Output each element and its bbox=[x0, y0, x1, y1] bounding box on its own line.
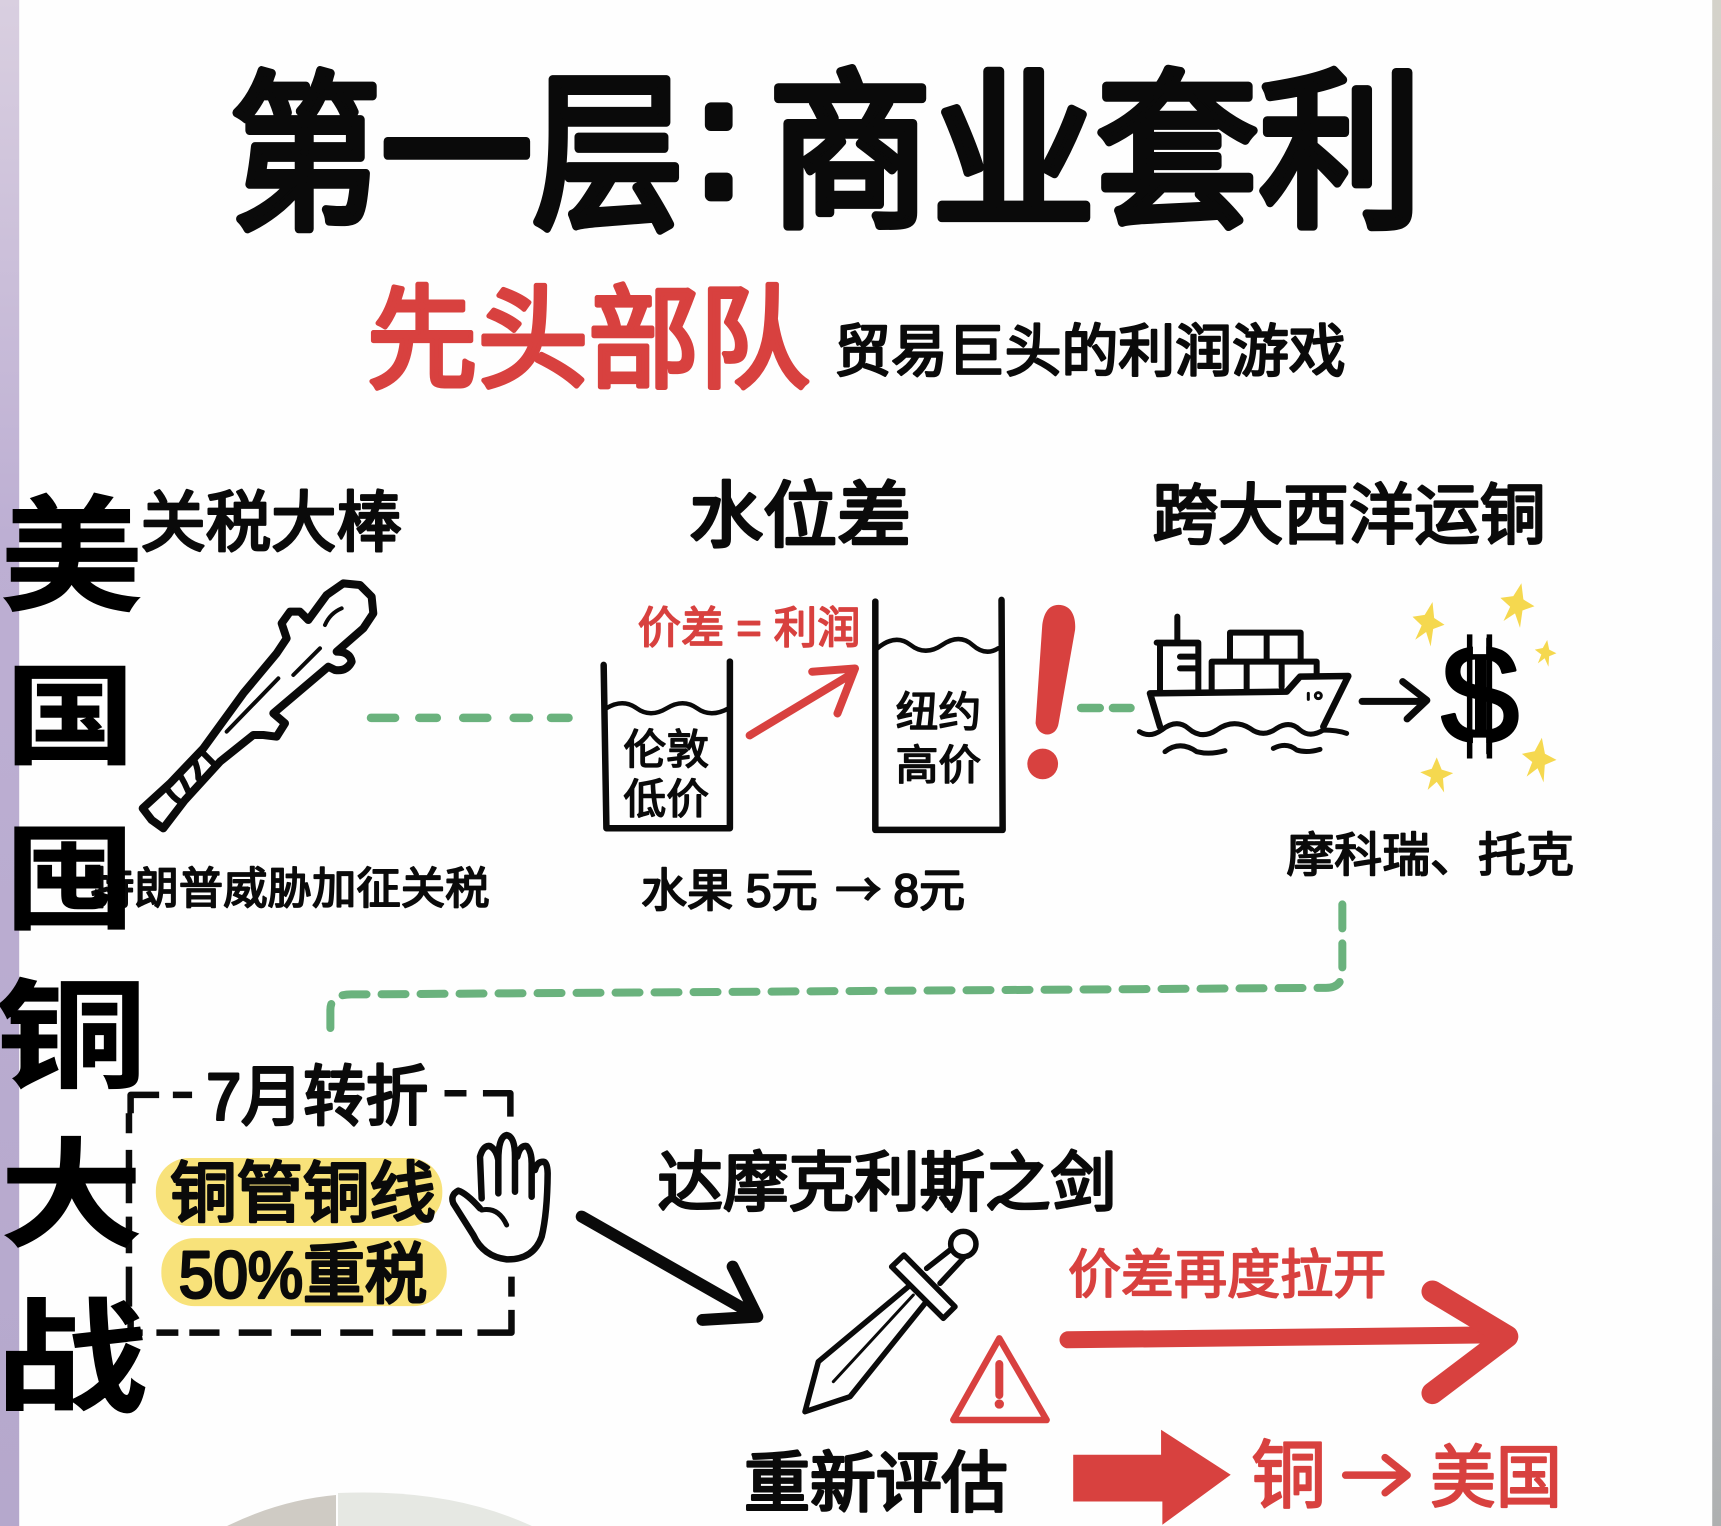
red long arrow bbox=[1068, 1291, 1507, 1393]
left tank: London low price: 低价 bbox=[623, 775, 709, 822]
caption: Mercuria, Trafigura: 摩科瑞、托克 bbox=[1286, 829, 1574, 882]
vertical title overlay: 美 bbox=[0, 487, 143, 627]
red rising arrow bbox=[750, 668, 855, 735]
vertical title overlay: 囤 bbox=[4, 817, 135, 945]
vertical title overlay: 大 bbox=[0, 1131, 143, 1263]
caption: fruit example: → bbox=[835, 855, 881, 921]
icon: stop hand bbox=[452, 1135, 548, 1259]
right tank: New York high price: 高价 bbox=[896, 741, 981, 788]
vertical title overlay: 国 bbox=[5, 657, 135, 779]
caption: Trump threat: 特朗普威胁加征关税 bbox=[90, 864, 490, 913]
right tank: New York high price: 纽约 bbox=[896, 689, 981, 736]
left tank: London low price: 伦敦 bbox=[623, 726, 709, 773]
icon: club bbox=[143, 583, 373, 828]
label: copper to USA bbox=[1251, 1434, 1562, 1518]
right tank: New York high price bbox=[875, 600, 1003, 830]
heading: transatlantic copper: 跨大西洋运铜 bbox=[1152, 478, 1545, 552]
photo fragment at bottom bbox=[227, 1492, 532, 1526]
heading: tariff club: 关税大棒 bbox=[140, 486, 402, 560]
subtitle: trade giants: 贸易巨头的利润游戏 bbox=[834, 320, 1346, 384]
highlight: copper pipes and wire: 铜管铜线 bbox=[170, 1156, 436, 1230]
box: July turning point bbox=[129, 1060, 548, 1333]
icon: cargo ship bbox=[1139, 617, 1348, 753]
icon: dollar sign with stars bbox=[1407, 580, 1559, 792]
caption: fruit example: 8元 bbox=[893, 865, 965, 917]
green dashed connector 1 bbox=[371, 714, 569, 722]
label: copper to USA: 美国 bbox=[1430, 1441, 1562, 1517]
label: copper to USA: 铜 bbox=[1251, 1434, 1326, 1518]
left tank: London low price bbox=[604, 662, 730, 828]
heading: sword of Damocles: 达摩克利斯之剑 bbox=[657, 1146, 1116, 1219]
title bbox=[229, 46, 1422, 252]
caption: fruit example: 水果 5元 bbox=[641, 865, 818, 917]
subtitle: vanguard: 先头部队 bbox=[367, 278, 810, 403]
title: 第一层 bbox=[229, 61, 684, 252]
vertical title overlay bbox=[0, 487, 147, 1429]
green dashed connector long bbox=[330, 904, 1342, 1037]
label: spread equals profit: 价差 = 利润 bbox=[638, 604, 860, 653]
caption: reassess: 重新评估 bbox=[744, 1446, 1008, 1520]
icon: warning triangle bbox=[953, 1338, 1047, 1420]
icon: red exclamation mark bbox=[1027, 605, 1075, 779]
label: spread widens: 价差再度拉开 bbox=[1068, 1246, 1386, 1305]
arrow: black diagonal bbox=[582, 1217, 757, 1320]
arrow: ship to dollar bbox=[1362, 682, 1427, 719]
icon: sword bbox=[805, 1231, 976, 1412]
title: 商业套利 bbox=[768, 59, 1422, 250]
icon: dollar sign with stars: $ bbox=[1441, 616, 1519, 773]
title: : bbox=[696, 46, 742, 230]
green dashed connector 2 bbox=[1081, 704, 1131, 712]
heading: water level difference: 水位差 bbox=[689, 476, 911, 557]
highlight: 50% heavy tax: 50%重税 bbox=[179, 1237, 427, 1311]
red block arrow bbox=[1073, 1430, 1231, 1525]
box: July turning point: 7月转折 bbox=[206, 1060, 428, 1134]
